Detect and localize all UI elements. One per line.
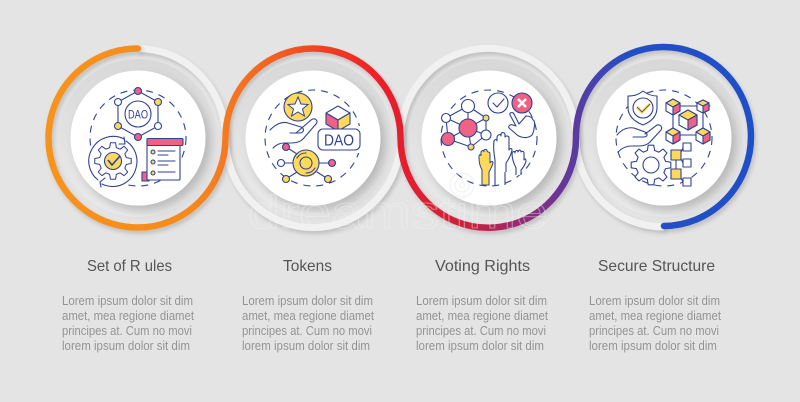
body text: Lorem ipsum dolor sit dim bbox=[416, 294, 547, 308]
column: tokens bbox=[242, 258, 374, 353]
yellow raised hand bbox=[479, 149, 493, 185]
body text: principes at. Cum no movi bbox=[242, 324, 372, 338]
white circle: secure structure bbox=[596, 70, 732, 206]
body text bbox=[242, 294, 374, 353]
body text: lorem ipsum dolor sit dim bbox=[416, 339, 544, 353]
body text: principes at. Cum no movi bbox=[416, 324, 546, 338]
icon: secure structure bbox=[616, 90, 712, 186]
cube bbox=[326, 106, 350, 131]
gradient loop line bbox=[48, 47, 751, 228]
open hand bbox=[617, 125, 662, 152]
heading: Set of R ules bbox=[87, 258, 172, 275]
body text: Lorem ipsum dolor sit dim bbox=[62, 294, 193, 308]
shield with check bbox=[628, 91, 657, 125]
column: voting rights bbox=[416, 258, 548, 353]
open hand bbox=[270, 119, 317, 148]
white raised hand bbox=[494, 133, 512, 185]
white circle: tokens bbox=[246, 70, 380, 206]
body text: lorem ipsum dolor sit dim bbox=[62, 339, 190, 353]
stock watermark bbox=[248, 173, 548, 238]
hexagon network: DAO bbox=[128, 108, 148, 122]
body text: amet, mea regione diamet bbox=[416, 309, 548, 323]
cube grid bbox=[666, 99, 710, 144]
pointing hand bbox=[509, 113, 535, 138]
molecule network bbox=[442, 100, 491, 150]
body text: Lorem ipsum dolor sit dim bbox=[589, 294, 720, 308]
body text: lorem ipsum dolor sit dim bbox=[242, 339, 370, 353]
stock watermark: dreamstime bbox=[248, 186, 548, 238]
icon: DAO rules bbox=[87, 88, 186, 187]
body text: amet, mea regione diamet bbox=[62, 309, 194, 323]
cross badge bbox=[512, 93, 532, 113]
body text bbox=[62, 294, 194, 353]
body text: amet, mea regione diamet bbox=[242, 309, 374, 323]
body text bbox=[416, 294, 548, 353]
pale track segments of the loop bbox=[138, 48, 664, 228]
icon: voting rights bbox=[441, 90, 537, 186]
block tree bbox=[671, 143, 691, 186]
white circle: voting rights bbox=[422, 70, 556, 206]
body text: principes at. Cum no movi bbox=[589, 324, 719, 338]
recessed discs behind the circles bbox=[59, 59, 743, 217]
column: secure structure bbox=[589, 258, 721, 353]
gear bbox=[631, 145, 671, 185]
column: set of rules bbox=[62, 258, 194, 353]
body text: Lorem ipsum dolor sit dim bbox=[242, 294, 373, 308]
body text: principes at. Cum no movi bbox=[62, 324, 192, 338]
body text: lorem ipsum dolor sit dim bbox=[589, 339, 717, 353]
heading: Tokens bbox=[283, 258, 332, 275]
star coin bbox=[284, 93, 312, 121]
white circle: set of rules bbox=[70, 70, 206, 206]
check badge bbox=[488, 93, 508, 113]
gear with check bbox=[87, 135, 139, 187]
DAO label box: DAO bbox=[324, 132, 354, 150]
small raised hand bbox=[512, 150, 526, 175]
heading: Voting Rights bbox=[435, 258, 530, 275]
body text bbox=[589, 294, 721, 353]
token network bbox=[278, 144, 336, 182]
icon: tokens bbox=[265, 90, 364, 186]
heading: Secure Structure bbox=[598, 258, 715, 275]
body text: amet, mea regione diamet bbox=[589, 309, 721, 323]
checklist document bbox=[142, 138, 183, 181]
